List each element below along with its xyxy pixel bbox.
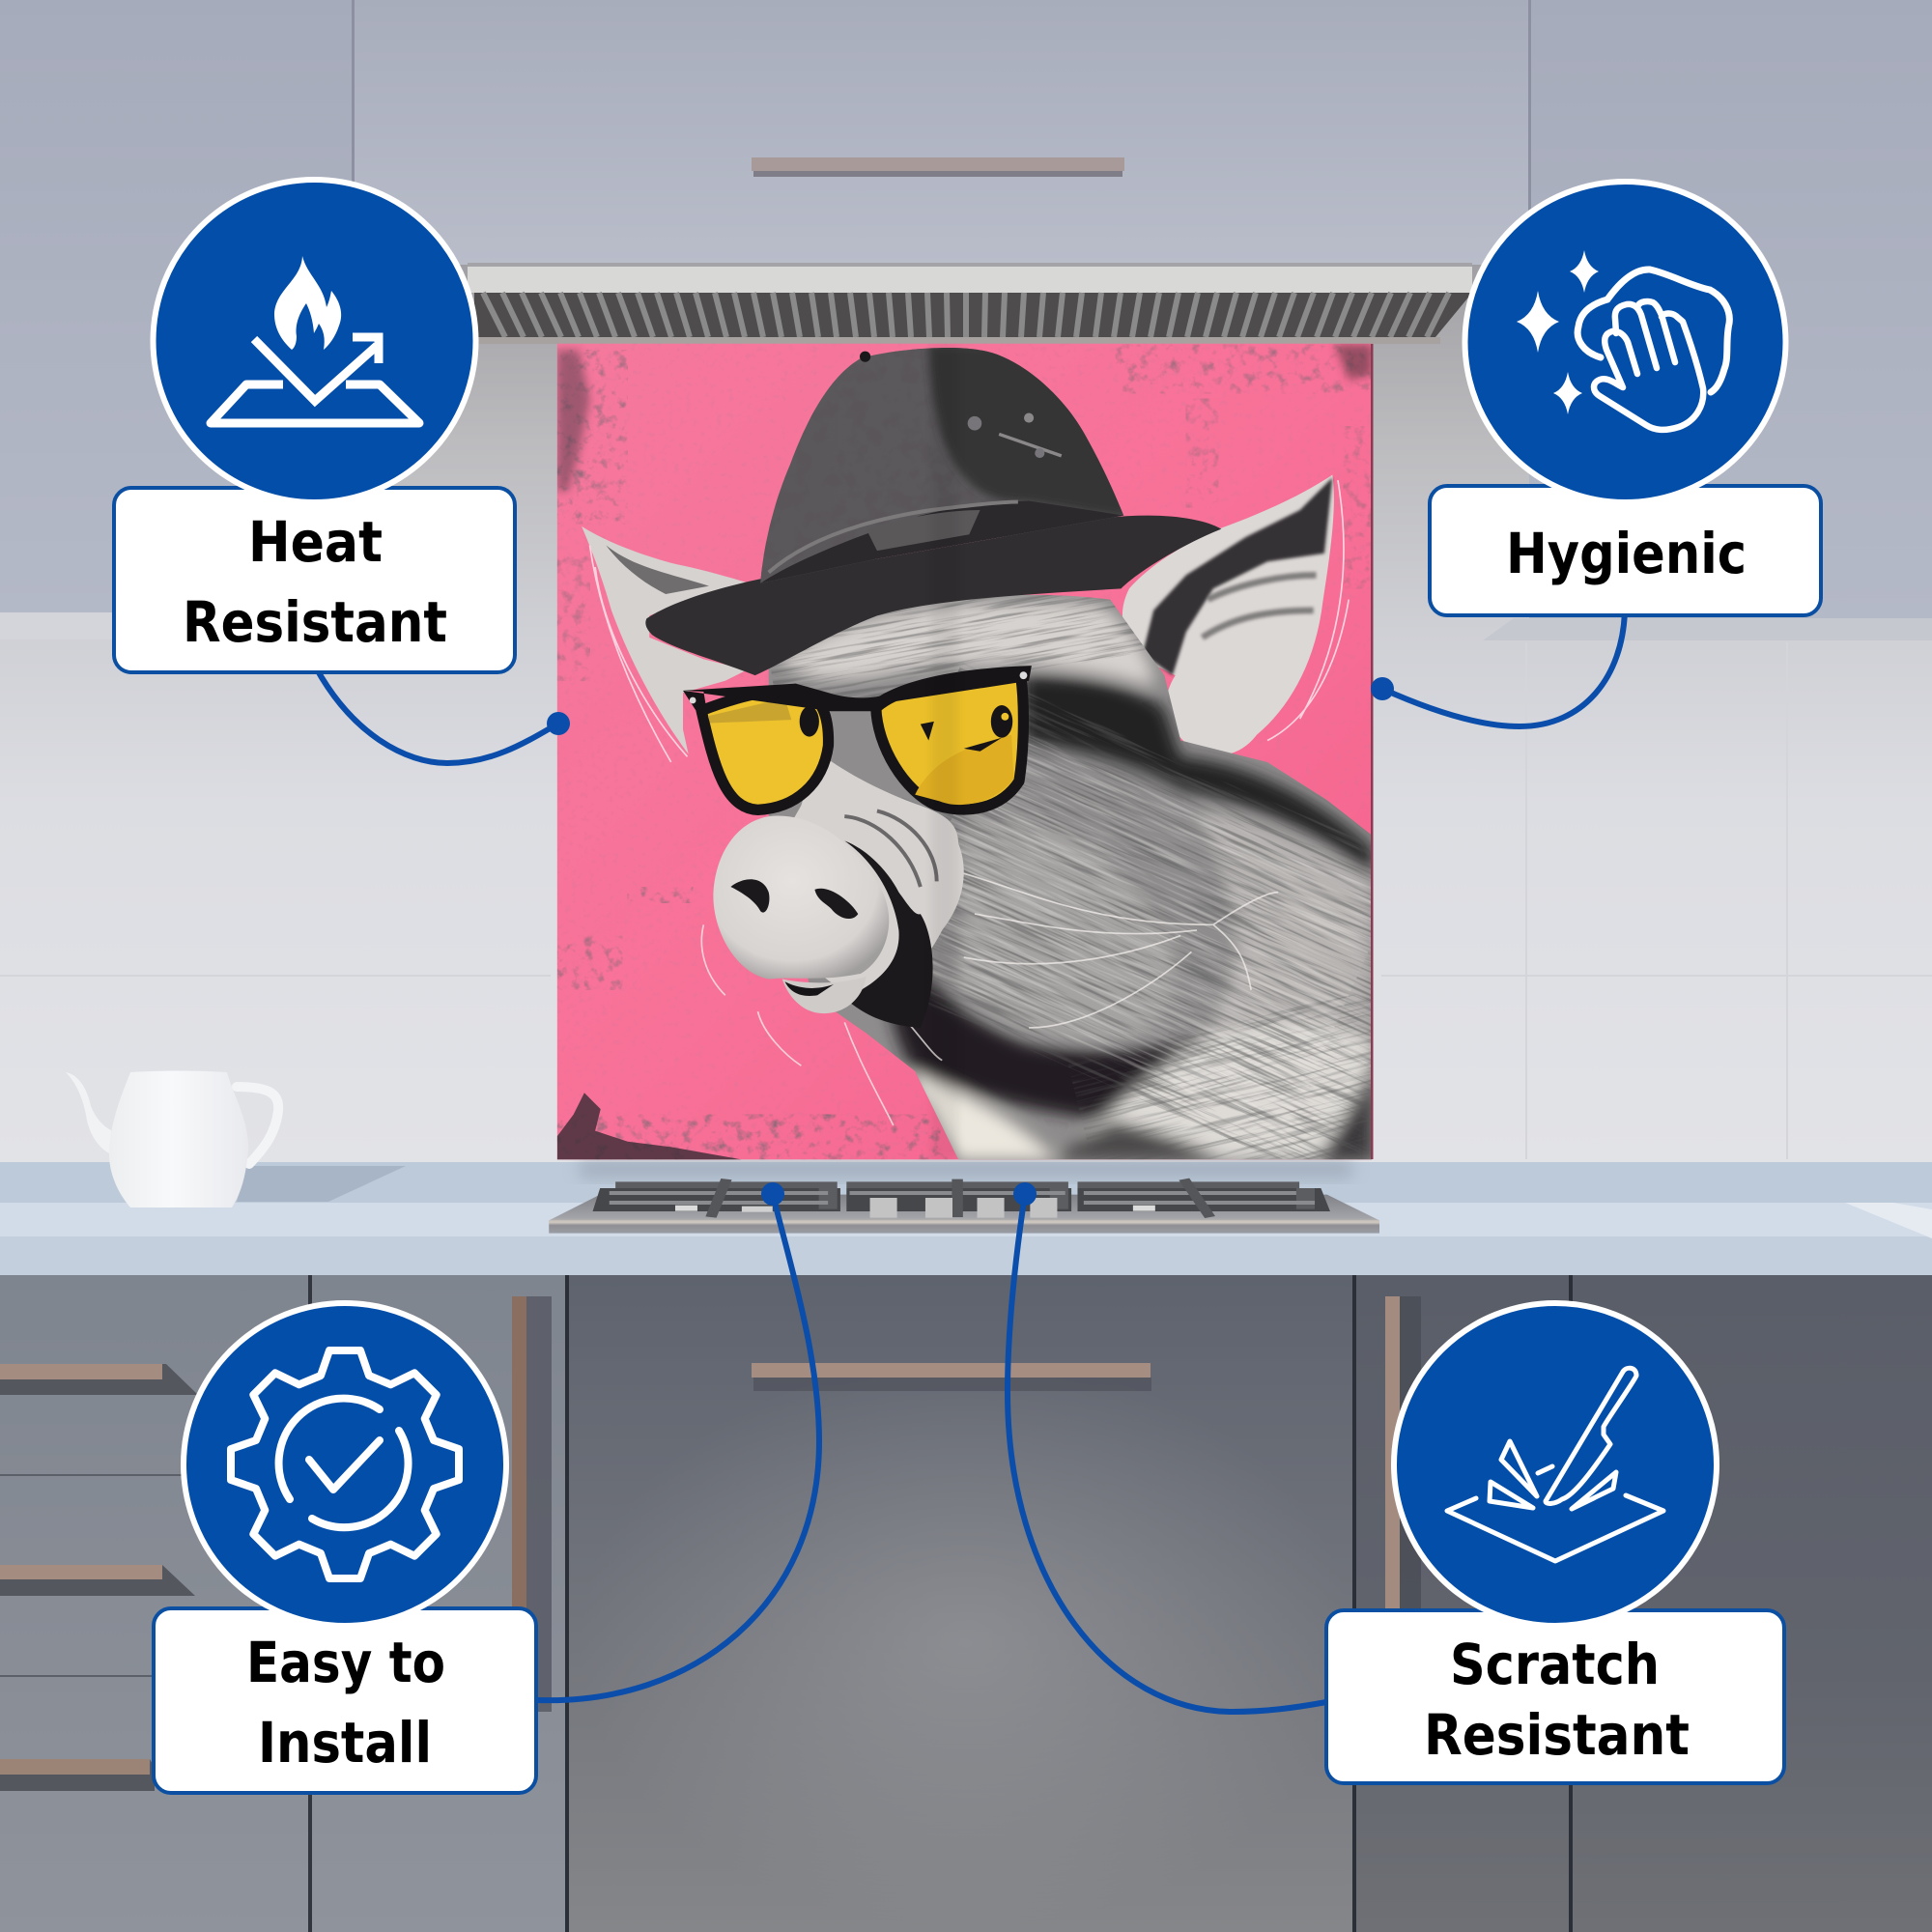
icon: flame over surface with deflecting arrow: [211, 256, 419, 423]
panel: pig artwork splashback: [556, 344, 1372, 1159]
spout: [66, 1072, 111, 1154]
connector: heat resistant: [316, 668, 570, 763]
countertop: [0, 1159, 1932, 1275]
badge circle: [153, 180, 475, 502]
connector: scratch resistant: [1008, 1182, 1326, 1712]
frame top bar and bridge: [683, 666, 1032, 712]
label box: [1326, 1610, 1784, 1783]
label box: [114, 488, 515, 672]
pot body: [109, 1070, 248, 1208]
grunge marks: [557, 344, 1372, 1159]
nostrils: [730, 879, 858, 919]
callout: easy to install: [154, 1303, 536, 1793]
extractor hood: [468, 263, 1472, 344]
callout: hygienic: [1430, 182, 1821, 615]
connector: easy to install: [538, 1182, 819, 1700]
label text: Scratch: [1450, 1632, 1660, 1697]
panel edge: [1371, 344, 1374, 1159]
lower cabinet handles: [0, 1296, 1421, 1791]
label text: Heat: [248, 509, 383, 575]
eyes: [800, 706, 819, 737]
hat crown: [757, 345, 1126, 588]
teapot: [66, 1070, 278, 1208]
connector: hygienic: [1371, 611, 1625, 726]
icon: knife scratching surface: [1447, 1368, 1663, 1561]
icon: gear with check mark: [231, 1350, 459, 1578]
glass glare: [931, 344, 958, 1159]
lower lip: [782, 980, 863, 1014]
badge circle: [184, 1303, 506, 1626]
upper cabinet handle: [752, 157, 1124, 177]
callout: heat resistant: [114, 180, 515, 672]
badge circle: [1394, 1303, 1717, 1626]
icon: hand wiping with sparkles: [1517, 250, 1729, 430]
whiskers and hair highlights: [701, 870, 1278, 1125]
nose bridge and wrinkles: [794, 761, 964, 1028]
right ear: [1122, 475, 1349, 755]
callout: heat resistant: Resistant: [183, 589, 447, 655]
callout: scratch resistant: [1326, 1303, 1784, 1783]
left ear: [582, 526, 750, 762]
label text: Easy to: [246, 1630, 445, 1695]
hat brim: [645, 516, 1221, 675]
fur shading: [771, 595, 1372, 1159]
snout: [713, 816, 889, 979]
wall: [0, 263, 1932, 1166]
badge circle: [1464, 182, 1785, 502]
right lens: [876, 675, 1023, 810]
pig body base: [769, 595, 1372, 1159]
upper kitchen cabinets: [0, 0, 1932, 618]
handle: [237, 1087, 278, 1164]
under-cabinet light strips: [0, 612, 1932, 640]
callout: easy to install: Install: [258, 1710, 432, 1776]
sunglasses: [683, 666, 1032, 810]
lower cabinets: [0, 1275, 1932, 1932]
callout: scratch resistant: Resistant: [1424, 1702, 1690, 1768]
mouth line: [785, 981, 834, 996]
cooktop: [549, 1179, 1379, 1234]
pink background: [557, 344, 1372, 1159]
label box: [1430, 486, 1821, 615]
left lens: [701, 691, 829, 810]
label text: Hygienic: [1506, 521, 1747, 586]
label box: [154, 1608, 536, 1793]
